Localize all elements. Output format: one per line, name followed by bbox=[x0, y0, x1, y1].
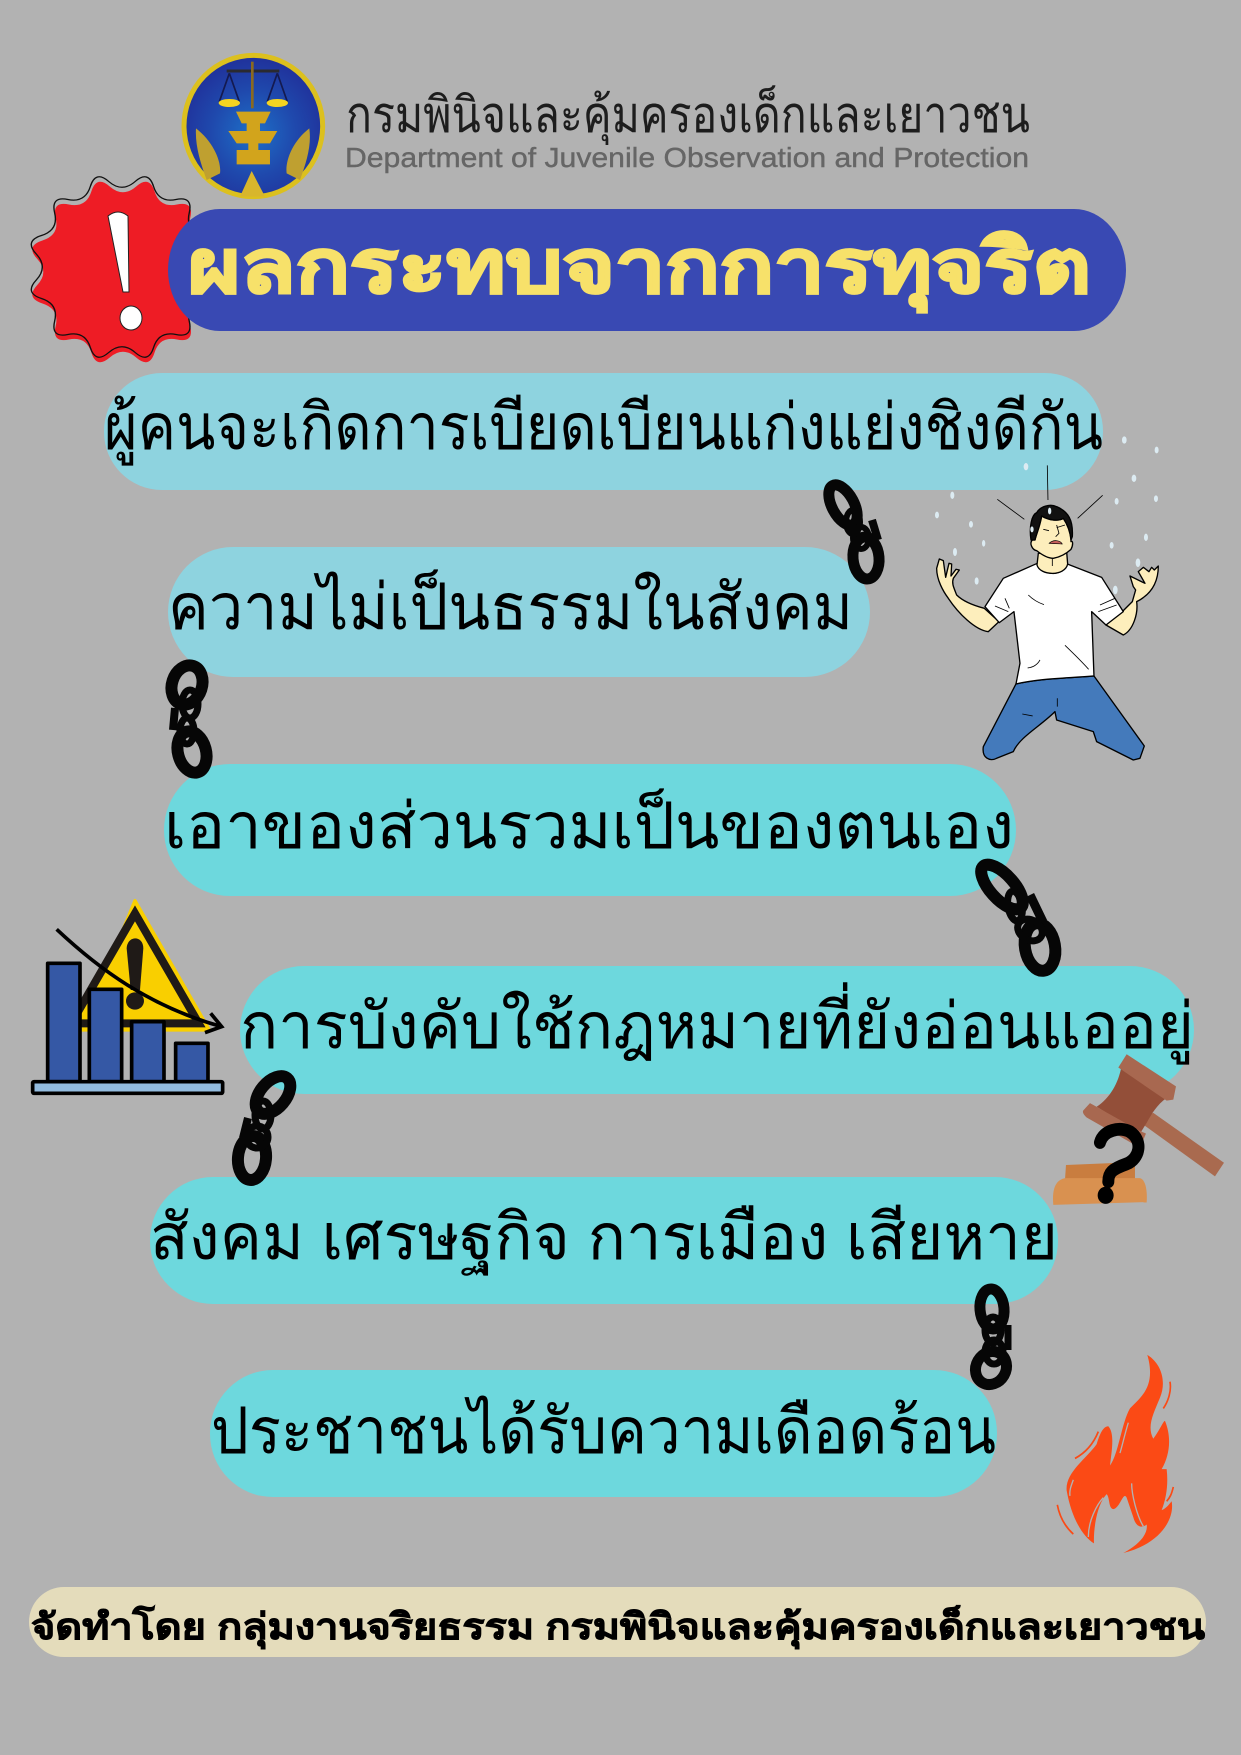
footer credit bbox=[29, 1587, 1206, 1657]
icon: chain link 5 bbox=[970, 1288, 1012, 1390]
panel: effect 5 bbox=[150, 1177, 1058, 1304]
icon: despairing man in rain bbox=[935, 436, 1159, 760]
logo text: Thai department name: กรมพินิจและคุ้มครองเด็กและเยาวชน bbox=[346, 85, 1030, 145]
panel: effect 1: ผู้คนจะเกิดการเบียดเบียนแก่งแย่งชิงดีกัน bbox=[104, 391, 1103, 466]
panel: effect 6 bbox=[210, 1370, 997, 1497]
icon: flame bbox=[1057, 1355, 1173, 1553]
icon: red alert badge bbox=[31, 177, 214, 362]
panel: effect 1 bbox=[104, 373, 1103, 490]
panel: effect 3 bbox=[164, 764, 1016, 896]
icon: falling bar chart with warning triangle bbox=[33, 901, 223, 1093]
icon: chain link 4 bbox=[236, 1070, 297, 1181]
icon: chain link 1 bbox=[823, 480, 881, 580]
title banner bbox=[168, 209, 1126, 331]
panel: effect 5: สังคม เศรษฐกิจ การเมือง เสียหาย bbox=[150, 1201, 1058, 1276]
panel: effect 3: เอาของส่วนรวมเป็นของตนเอง bbox=[164, 789, 1014, 862]
panel: effect 2 bbox=[168, 547, 870, 677]
icon: chain link 3 bbox=[974, 858, 1059, 973]
panel: effect 4 bbox=[240, 966, 1194, 1094]
footer credit: จัดทำโดย กลุ่มงานจริยธรรม กรมพินิจและคุ้มครองเด็กและเยาวชน bbox=[31, 1604, 1205, 1650]
panel: effect 2: ความไม่เป็นธรรมในสังคม bbox=[168, 570, 853, 643]
title banner: ผลกระทบจากการทุจริต bbox=[188, 225, 1091, 313]
logo text: English department name: Department of Juvenile Observation and Protection bbox=[345, 142, 1029, 173]
panel: effect 6: ประชาชนได้รับความเดือดร้อน bbox=[211, 1395, 996, 1467]
panel: effect 4: การบังคับใช้กฎหมายที่ยังอ่อนแออยู่ bbox=[240, 982, 1194, 1065]
icon: gavel with question mark bbox=[1053, 1054, 1224, 1205]
logo: department emblem bbox=[184, 55, 323, 197]
icon: chain link 2 bbox=[167, 661, 211, 776]
